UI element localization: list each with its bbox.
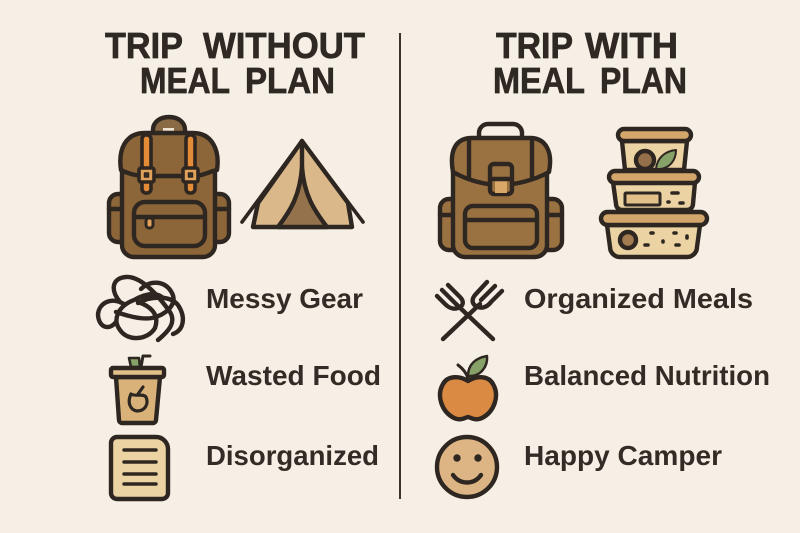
icon: tangled cord	[98, 277, 183, 340]
label: wasted food: Wasted Food	[206, 360, 381, 391]
title: trip with meal plan: TRIP	[496, 25, 573, 66]
bottom container	[601, 212, 707, 257]
icon: crossed forks	[437, 282, 502, 339]
center divider	[399, 33, 401, 499]
icon: tent	[242, 141, 363, 227]
label: messy gear: Messy Gear	[206, 283, 363, 314]
middle container	[609, 171, 699, 210]
label: disorganized: Disorganized	[206, 440, 379, 471]
top container	[618, 129, 691, 170]
title: trip without meal plan: PLAN	[245, 60, 335, 101]
label: balanced nutrition: Balanced Nutrition	[524, 360, 770, 391]
label: happy camper: Happy Camper	[524, 440, 722, 471]
title: trip without meal plan	[105, 25, 365, 101]
title: trip without meal plan: WITHOUT	[203, 25, 365, 66]
title: trip with meal plan: MEAL	[493, 60, 585, 101]
label: organized meals: Organized Meals	[524, 283, 753, 314]
icon: apple	[440, 356, 496, 419]
icon: document list	[111, 437, 168, 499]
title: trip with meal plan: WITH	[585, 25, 678, 66]
icon: stacked food containers	[601, 129, 707, 257]
icon: takeaway cup with apple	[111, 356, 164, 423]
icon: backpack	[440, 124, 562, 257]
icon: backpack with orange straps	[109, 117, 229, 257]
icon: smiley face	[437, 437, 497, 497]
title: trip with meal plan: PLAN	[600, 60, 687, 101]
title: trip without meal plan: TRIP	[105, 25, 183, 66]
title: trip with meal plan	[493, 25, 687, 101]
title: trip without meal plan: MEAL	[140, 60, 230, 101]
